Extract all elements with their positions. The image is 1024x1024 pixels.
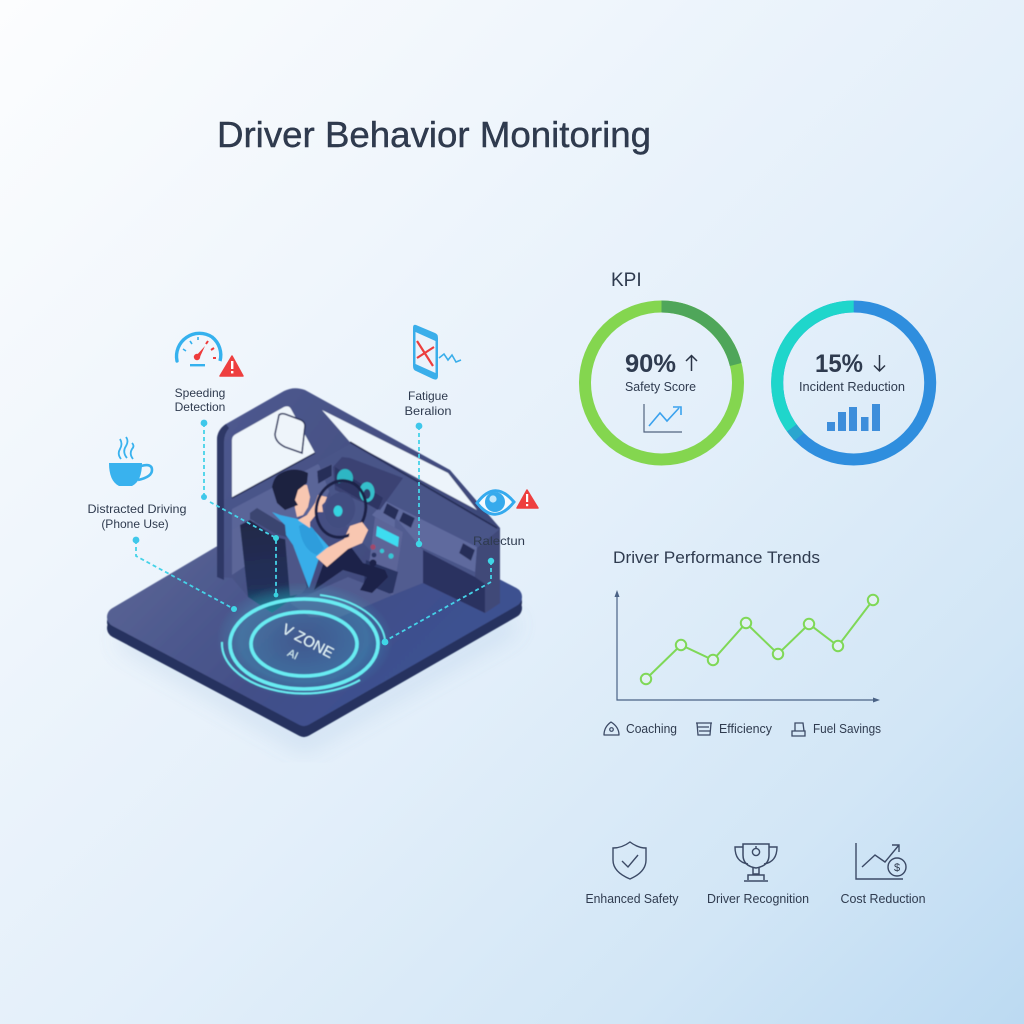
- sleeve: [299, 524, 324, 555]
- label: eye detection: Ralectun: [473, 534, 525, 548]
- ring: [585, 306, 738, 460]
- benefit: cost reduction: $: [894, 862, 900, 874]
- connector: distracted driving: [133, 537, 237, 612]
- benefit: cost reduction: [840, 843, 926, 906]
- mini bar chart: [827, 404, 880, 431]
- data points: [641, 595, 878, 684]
- arrow up: [686, 356, 697, 371]
- ring: [777, 306, 930, 460]
- rear seat block: [232, 520, 250, 575]
- windshield: [322, 410, 477, 510]
- connector: fatigue: [416, 423, 422, 547]
- dashboard light strip: [372, 501, 477, 572]
- benefit: enhanced safety: [586, 842, 679, 906]
- mini line chart: [644, 404, 682, 432]
- right arm: [316, 522, 368, 567]
- headrest: [250, 508, 287, 537]
- dash right wall: [475, 529, 500, 613]
- icon: phone with cross: [413, 325, 461, 380]
- icon: eye with warning: [477, 490, 538, 514]
- AI zone text: AI: [285, 647, 300, 663]
- label: speeding detection: Detection: [175, 400, 225, 414]
- legend: efficiency: [696, 722, 773, 736]
- connector: eye detection: [382, 558, 494, 645]
- gauge recess: [335, 467, 383, 510]
- label: fatigue: Beralion: [404, 404, 452, 418]
- label: fatigue: [404, 389, 452, 418]
- window sill edge: [232, 453, 315, 498]
- legend: coaching: Coaching: [626, 722, 677, 736]
- gauges: [337, 469, 374, 502]
- mirror: [275, 414, 305, 453]
- AI zone rings: [222, 595, 385, 693]
- platform top: [117, 497, 512, 716]
- seat side bolster: [285, 537, 307, 596]
- car body backing: [217, 388, 500, 613]
- AI zone text: V ZONE: [279, 621, 336, 662]
- heading: KPI: KPI: [611, 270, 642, 291]
- left arm: [298, 495, 327, 528]
- benefit: driver recognition: [707, 844, 809, 906]
- axes: [614, 590, 880, 702]
- air vents: [317, 464, 475, 561]
- benefit: cost reduction: Cost Reduction: [840, 892, 926, 906]
- label: fatigue: Fatigue: [408, 389, 448, 403]
- legend: fuel savings: Fuel Savings: [813, 722, 881, 736]
- windshield lower edge: [350, 442, 497, 528]
- label: speeding detection: [175, 386, 225, 414]
- benefit: enhanced safety: Enhanced Safety: [586, 892, 679, 906]
- icon: speedometer with warning: [177, 333, 243, 376]
- neck and face: [295, 485, 310, 517]
- platform shadow: [120, 615, 515, 750]
- pillar outer edge: [217, 424, 229, 580]
- label: Incident Reduction: [799, 380, 905, 394]
- line chart: driver performance trends: [614, 590, 880, 702]
- label: distracted driving: Distracted Driving: [88, 502, 186, 516]
- panel: safety score gauge: [585, 306, 738, 460]
- right hand on wheel: [348, 522, 368, 547]
- hair: [272, 470, 308, 510]
- console side column: [393, 517, 423, 595]
- AI zone glow: [216, 582, 392, 698]
- legend: efficiency: Efficiency: [719, 722, 773, 736]
- driver figure: [272, 470, 388, 593]
- lower dash cavity: [423, 550, 485, 613]
- shirt: [272, 512, 329, 588]
- legs: [314, 543, 388, 593]
- side window: [232, 406, 315, 498]
- label: Safety Score: [625, 380, 696, 394]
- title: Driver Behavior Monitoring: [217, 114, 651, 155]
- platform side: [117, 502, 512, 727]
- heading: driver performance trends: Driver Performance Trends: [613, 548, 820, 567]
- driver seat: [240, 508, 308, 613]
- connector: speeding detection: [201, 420, 279, 597]
- label: speeding detection: Speeding: [175, 386, 225, 400]
- label: distracted driving: (Phone Use): [101, 517, 169, 531]
- rear interior panel: [232, 464, 335, 532]
- value: 15%: [815, 350, 863, 378]
- panel: isometric driver cabin illustration: [117, 388, 515, 750]
- panel: incident reduction gauge: [777, 306, 930, 460]
- cabin floor: [290, 577, 393, 617]
- dashboard upper surface: [318, 444, 500, 613]
- instrument hood: [333, 457, 403, 510]
- icon: coffee cup: [109, 437, 152, 486]
- label: distracted driving: [88, 502, 186, 531]
- benefit: driver recognition: Driver Recognition: [707, 892, 809, 906]
- legend: coaching: [604, 722, 677, 736]
- trend line: [646, 600, 873, 679]
- value: 90%: [625, 350, 676, 378]
- centre console: [363, 517, 403, 598]
- steering wheel: [310, 475, 372, 543]
- arrow down: [874, 355, 885, 371]
